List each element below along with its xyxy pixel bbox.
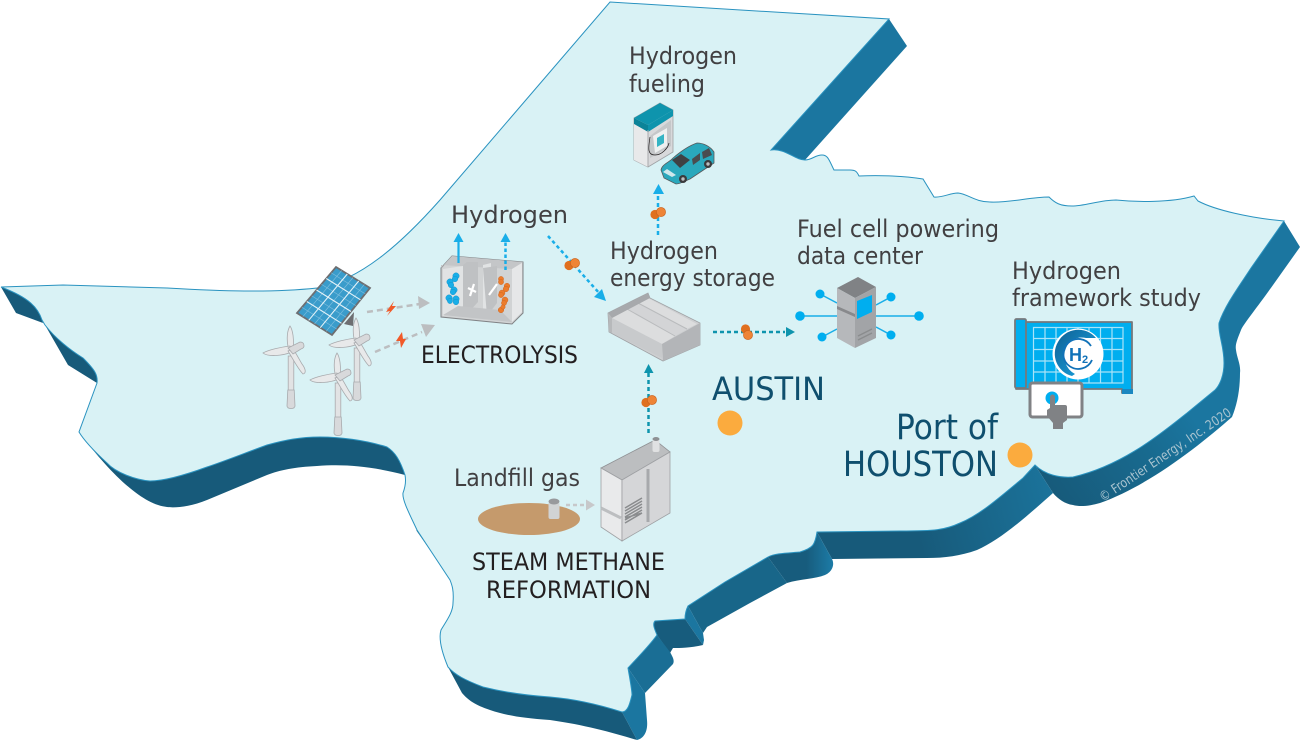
icon: hydrogen framework study blueprint: H [1069,345,1082,365]
label: Hydrogen energy storage: Hydrogen [610,237,718,265]
label: Port of HOUSTON: HOUSTON [843,445,998,485]
label: STEAM METHANE REFORMATION: REFORMATION [486,576,651,604]
arrow: hydrogen up [500,233,510,270]
icon: hydrogen fueling station [634,103,673,167]
label: Hydrogen framework study: framework study [1012,284,1201,312]
arrow: solar to electrolysis [367,296,430,316]
label: ELECTROLYSIS: ELECTROLYSIS [421,341,578,369]
label: Hydrogen fueling: Hydrogen [629,42,737,70]
label: Port of HOUSTON: Port of [896,408,999,448]
icon: fuel cell data center [795,277,924,348]
arrow: landfill to reformer [566,500,595,510]
label: STEAM METHANE REFORMATION: STEAM METHANE [472,548,665,576]
label: Landfill gas: Landfill gas [454,464,580,492]
label: Hydrogen framework study: Hydrogen [1012,257,1121,285]
icon: oxygen bubbles [446,273,459,305]
arrow: wind to electrolysis [375,324,435,352]
arrow: storage to fueling [650,184,666,235]
icon: electrolysis tank [441,256,523,324]
city marker: Port of Houston [1008,442,1032,468]
icon: wind turbine 3 [310,353,352,436]
label: Fuel cell powering data center: Fuel cell powering [797,215,999,243]
icon: hydrogen framework study blueprint: 2 [1082,354,1088,366]
icon: solar panel [297,267,370,335]
arrow: reformer to storage [641,364,657,433]
arrow: storage to data center [713,324,795,340]
icon: car [661,143,714,184]
icon: hydrogen bubbles [498,276,510,313]
label: Hydrogen energy storage: energy storage [610,264,775,292]
label: Hydrogen fueling: fueling [629,70,705,98]
arrow: oxygen up [454,233,464,263]
icon: wind turbine 1 [263,326,305,409]
label: AUSTIN: AUSTIN [712,370,825,408]
icon: wind turbine 2 [329,318,371,401]
icon: hydrogen energy storage [608,293,700,361]
icon: landfill [478,498,580,535]
icon: hydrogen framework study blueprint [1015,319,1133,394]
copyright note: © Frontier Energy, Inc. 2020 [1097,406,1235,505]
icon: tablet with pointing hand [1030,383,1082,429]
label: Hydrogen: Hydrogen [451,201,568,229]
icon: steam methane reformer [601,437,670,541]
label: Fuel cell powering data center: data center [797,242,923,270]
arrow: hydrogen to storage [548,236,606,301]
city marker: Austin [718,410,742,436]
